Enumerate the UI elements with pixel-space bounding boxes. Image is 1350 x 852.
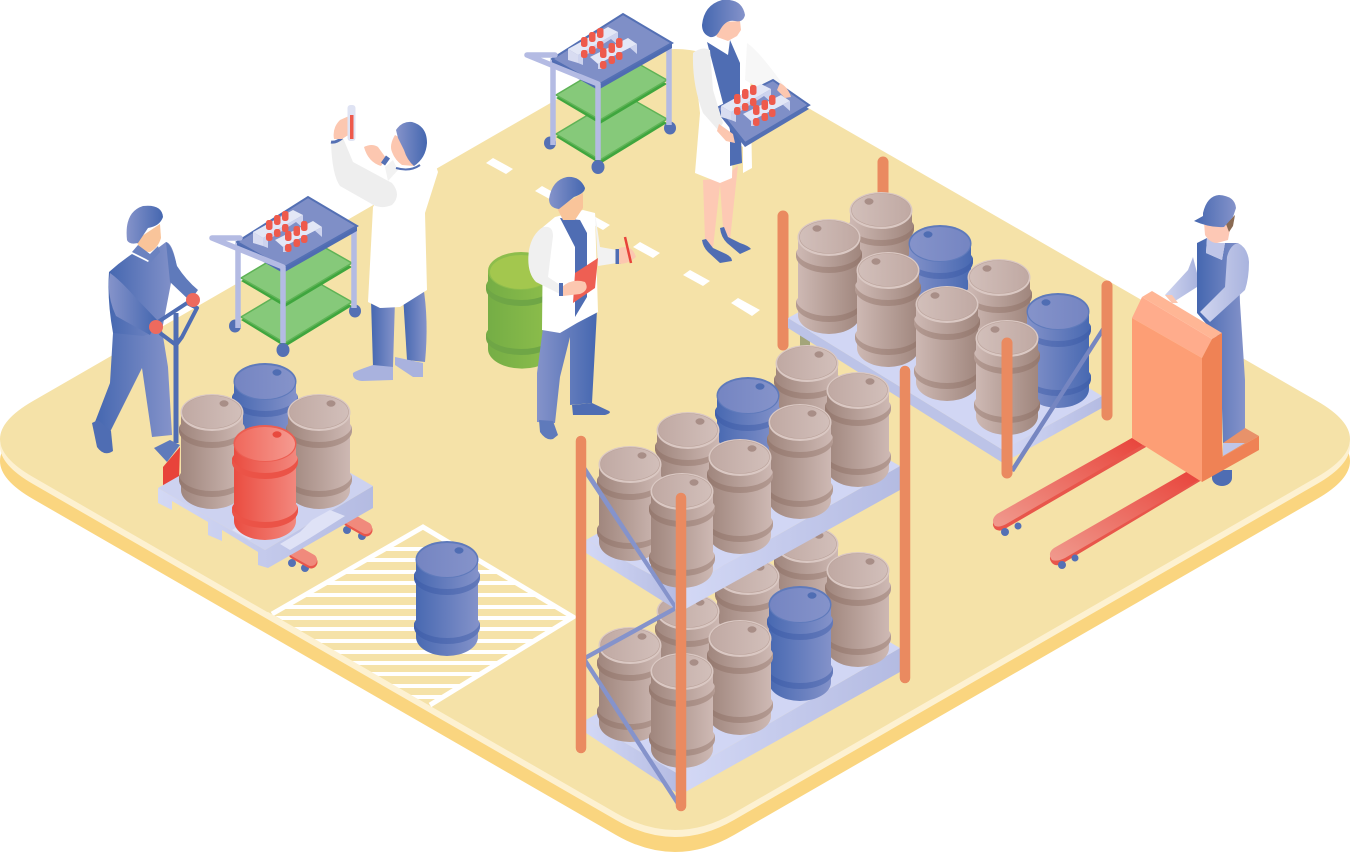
cart: top trolley bbox=[527, 14, 676, 174]
worker in overalls behind lift truck bbox=[1165, 195, 1249, 486]
barrel: green behind scientist bbox=[486, 252, 556, 369]
scientist with clipboard bbox=[528, 177, 636, 439]
worker pushing pallet truck bbox=[92, 206, 200, 490]
scientist holding test tube bbox=[331, 105, 438, 381]
pallet with barrels bbox=[158, 363, 373, 572]
hatched floor zone bbox=[260, 527, 590, 709]
barrel: blue in hatched zone bbox=[414, 541, 480, 656]
scientist woman carrying tray bbox=[693, 0, 809, 263]
cart: left trolley bbox=[212, 197, 361, 357]
shelving rack: center, two levels of barrels bbox=[581, 345, 905, 806]
shelving rack: right, with barrels bbox=[783, 162, 1107, 473]
road dashes bbox=[486, 158, 760, 316]
lift truck bbox=[993, 291, 1259, 569]
